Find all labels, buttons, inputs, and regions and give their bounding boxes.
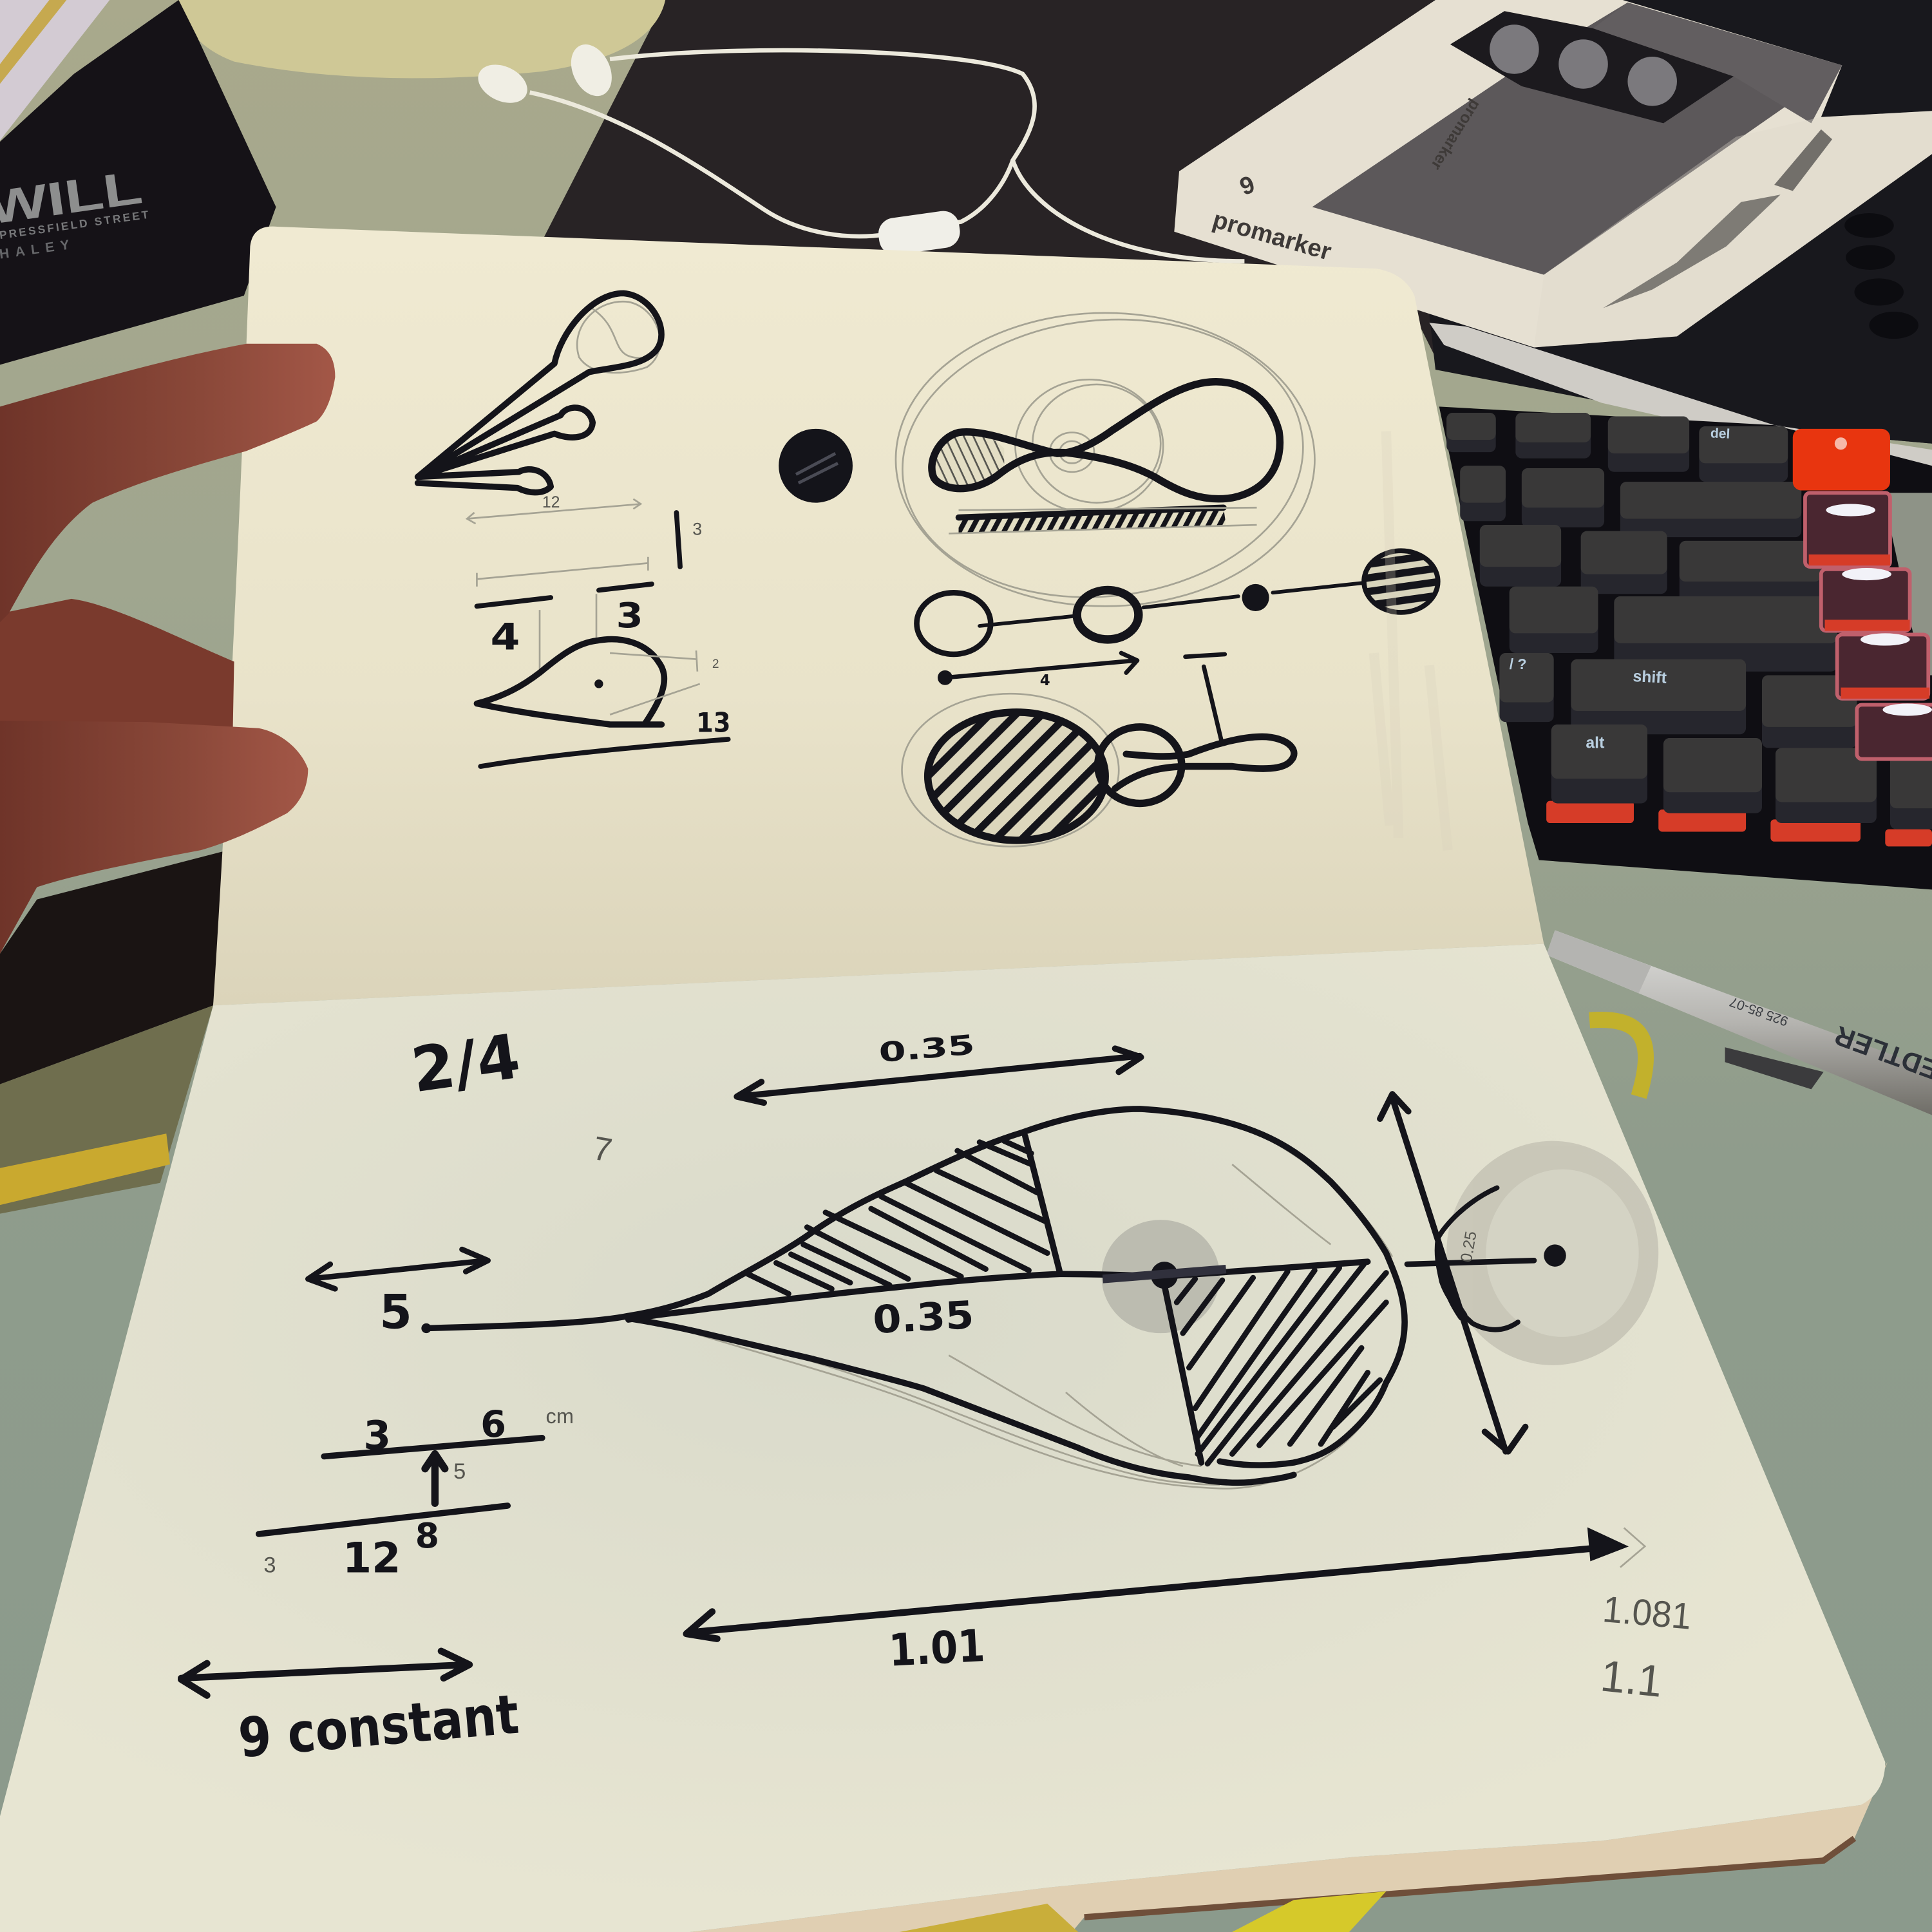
keyboard: del [1710,426,1730,442]
dimension: stacked ratios: 5 [453,1459,466,1484]
notes: pencil figures: 1.1 [1598,1651,1665,1707]
sketch: hatched ball with handle [902,694,1294,846]
dimension: stacked ratios [259,1403,574,1582]
arrow: top width: 0.35 [878,1028,976,1068]
notes: pencil figures: 1.081 [1601,1589,1693,1638]
mark: ghost centre and radius [1407,1188,1566,1330]
notebook upper page [213,227,1544,1005]
promarker box: 6 [1236,169,1258,200]
olive shadow beside notebook [0,1005,213,1214]
arrow: vertical height [1380,1094,1526,1452]
dimension: nine constant: 9 constant [236,1683,521,1770]
dark object under hand [0,850,228,1084]
mark: ghost centre and radius: 0.25 [1457,1230,1481,1264]
mechanical pencil [1546,931,1932,1115]
sketch: fan of three lollipops: 3 [692,519,702,538]
notebook lower page [0,944,1885,1932]
ghost marks from reverse page [1374,431,1448,850]
black book with title: PRESSFIELD STREET [0,208,149,242]
dark desk mat [530,0,1932,444]
sketch: dimension arrow and tick [938,653,1225,739]
notebook page stack [690,1762,1888,1932]
sketch: teardrop with ratios: 4 [490,615,520,658]
cream container [178,0,665,78]
strip of white paper under box [1429,323,1932,468]
yellow ribbons at the bottom [900,1891,1386,1932]
dimension: stacked ratios: 6 [480,1403,506,1446]
sketch: chain of four circles [916,551,1438,654]
hand holding notebook [0,344,335,954]
main sketch: teardrop logo [425,1109,1405,1488]
earphones [472,38,1244,261]
dimension: stacked ratios: cm [546,1405,574,1428]
dimension: stacked ratios: 3 [363,1413,391,1459]
dimension: stacked ratios: 12 [343,1534,401,1582]
black book with title [0,0,276,365]
sketch: dimension arrow and tick: 4 [1040,672,1050,689]
sketch: infinity loop with construction circles [889,300,1317,616]
shade: centre of page [0,944,1885,1932]
ghosted circle from reverse page [1101,1141,1658,1365]
label: small seven: 7 [591,1129,615,1169]
sketch: teardrop with ratios: 13 [696,706,731,738]
yellow ribbon left [0,1133,170,1205]
arrow: total width [687,1528,1645,1677]
icon: solid black dot [779,429,853,503]
black book with title: HALEY [0,236,77,262]
promarker box: promarker [1209,205,1334,266]
keyboard [1439,406,1932,889]
white paper corner [0,0,109,140]
mechanical pencil: 925 85-07 [1728,994,1790,1028]
sketch: fan of three lollipops [418,293,702,587]
keyboard: / ? [1510,656,1527,672]
yellow ribbon right [1589,1019,1646,1097]
notes: pencil figures [1598,1589,1693,1707]
arrow: total width: 1.01 [887,1620,986,1677]
black mat beside the box [1429,0,1932,444]
promarker box: promarker [1427,97,1484,173]
arrow: top width [737,1028,1141,1103]
dimension: five [308,1249,488,1340]
dimension: stacked ratios: 3 [263,1553,276,1577]
label: inner ratio: 0.35 [872,1293,975,1342]
sketch: teardrop with ratios: 3 [616,595,643,636]
promarker box [1174,0,1932,348]
dimension: nine constant [181,1651,521,1770]
dimension: five: 5 [379,1285,412,1340]
dimension: stacked ratios: 8 [415,1515,439,1556]
label: fraction: 2/4 [407,1020,524,1106]
sketch: teardrop with ratios [477,584,731,766]
keyboard: shift [1633,667,1667,687]
sketch: teardrop with ratios: 2 [712,658,719,671]
sketch: fan of three lollipops: 12 [542,493,560,511]
keyboard: alt [1586,734,1604,752]
